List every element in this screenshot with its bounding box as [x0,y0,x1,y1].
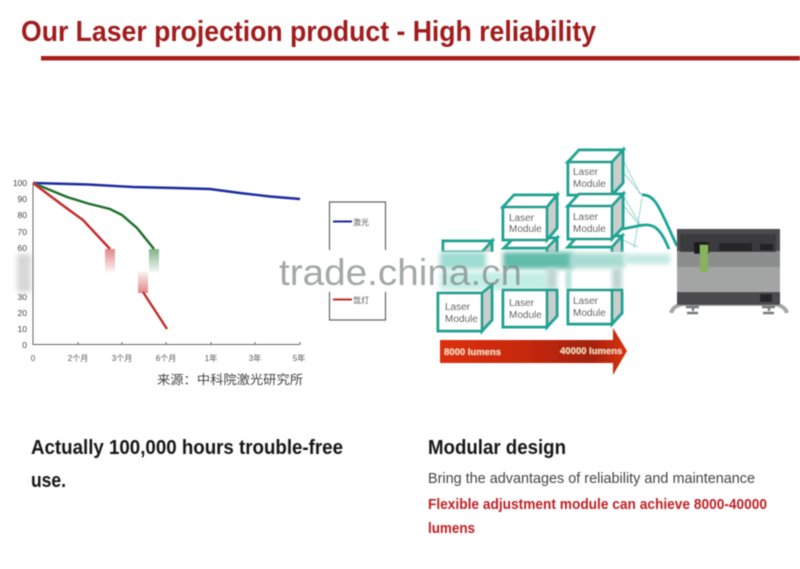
x axis labels: 1年 [205,353,217,363]
module: column 3 top: Module [573,179,606,190]
x axis labels: 2个月 [68,354,88,363]
y axis labels: 80 [18,210,27,220]
source caption: 来源：中科院激光研究所 [157,372,303,387]
module: column 3 second: Laser [573,212,599,223]
legend entry: laser [333,220,352,222]
left caption: use. [31,470,66,492]
projector device [671,229,787,313]
red line lower [143,292,167,329]
y axis labels: 10 [18,324,27,334]
y axis labels: 70 [18,227,27,237]
device bottom controls [760,294,772,302]
module: column 1 bottom: Module [445,314,478,325]
y axis labels: 0 [22,340,27,350]
red highlight text [428,496,767,537]
module: column 2 bottom [503,290,557,327]
axes [33,183,300,344]
x axis labels: 3个月 [112,354,132,363]
module: column 3 bottom: Laser [573,296,599,307]
thick cables [642,195,677,246]
module: column 3 bottom [568,290,622,324]
module: column 3 top: Laser [573,167,599,178]
body text: Bring the advantages of reliability and maintenance [428,470,755,487]
module: column 3 second [568,194,623,239]
device feet [671,304,787,313]
red highlight text: Flexible adjustment module can achieve 8000-40000 [428,496,767,513]
device body [677,229,780,305]
thin wires [623,160,642,248]
module: column 2 top: Laser [509,213,535,224]
lumens arrow: 8000 lumens [444,347,501,358]
x axis labels: 0 [31,354,36,363]
line chart: lifetime [13,178,305,387]
x axis labels [31,353,305,363]
red line fade [105,249,115,272]
device green indicator [700,245,708,272]
left caption: Actually 100,000 hours trouble-free [31,437,343,459]
module: column 1 bottom: Laser [445,302,471,313]
column 2 middle module [504,238,557,282]
x axis labels: 5年 [293,353,305,363]
red line lower fade [138,271,148,293]
module: column 3 top [568,150,623,195]
blue line: laser [33,183,300,199]
y axis labels: 100 [13,178,27,188]
y axis labels [13,178,27,350]
module: column 2 top [503,195,557,240]
y axis labels: 30 [18,292,27,302]
legend box [330,202,386,320]
green line [33,183,154,249]
x axis labels: 6个月 [156,354,176,363]
y axis label blur [17,254,31,292]
x axis labels: 3年 [249,353,261,363]
watermark: trade.china.cn [279,252,522,293]
device middle haze [677,251,780,292]
module: column 1 bottom [438,285,492,331]
left caption [31,437,343,492]
module: column 2 bottom: Laser [509,298,535,309]
legend: 激光 [353,217,369,227]
band haze [430,252,670,292]
red highlight text: lumens [428,520,475,537]
column 1 upper module [443,241,492,282]
y axis labels: 60 [18,243,27,253]
title rule [41,56,800,60]
connection lines [622,160,677,249]
legend: 氙灯 [353,295,369,305]
heading: modular design: Modular design [428,437,566,459]
lumens arrow [440,328,627,375]
device top panel [680,234,776,252]
right caption [428,437,767,537]
legend entry: lamp [333,298,352,300]
title: Our Laser projection product - High reliability [21,16,596,48]
module: column 2 bottom: Module [509,310,542,321]
lumens arrow: 40000 lumens [560,346,622,357]
red line upper [33,183,110,249]
device slots [694,242,709,254]
y axis labels: 90 [18,194,27,204]
module: column 2 top: Module [509,224,542,235]
legend [330,202,386,320]
laser module stack [430,150,670,331]
y axis labels: 20 [18,308,27,318]
green line fade [149,249,159,272]
module: column 3 second: Module [573,224,606,235]
column 3 middle module [568,236,622,282]
module: column 3 bottom: Module [573,308,606,319]
